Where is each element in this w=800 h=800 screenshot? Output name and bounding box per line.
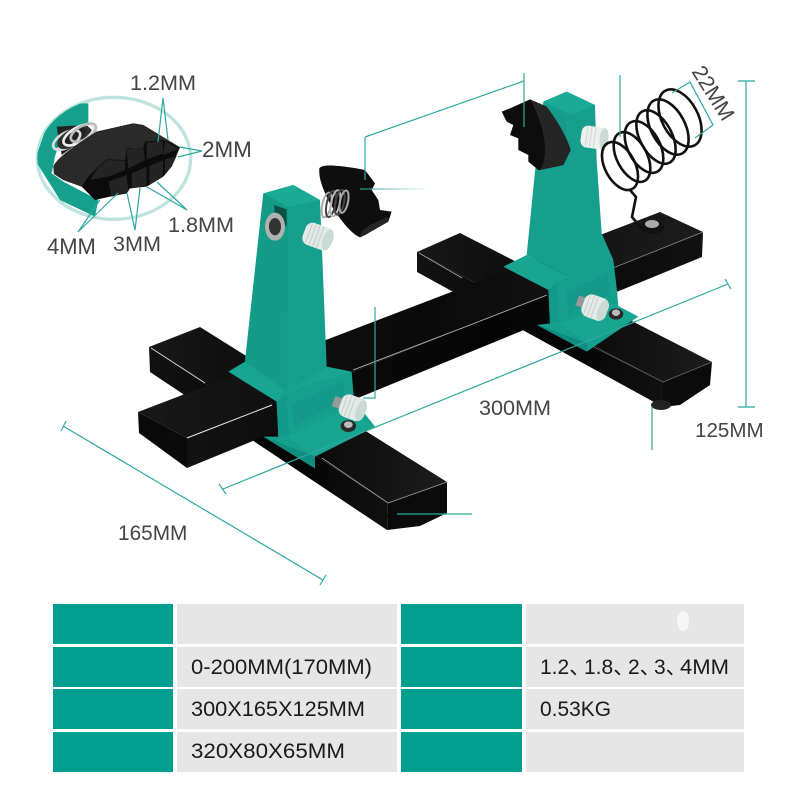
table row 2: 1.2、 (540, 656, 590, 679)
table row 4: 320X80X65MM (191, 740, 345, 763)
table row 1 (53, 604, 744, 644)
inset green stand (35, 103, 98, 217)
table row 3: 0.53KG (540, 698, 611, 721)
label: 165MM: 165MM (118, 522, 187, 545)
dimension: 165MM line (61, 421, 326, 585)
right foot bar (417, 233, 712, 410)
right green stand (503, 92, 638, 352)
table row 2: 4MM (680, 656, 729, 679)
left foot bar (149, 327, 447, 530)
table row 2: 2、 (628, 656, 661, 679)
left tower screw (265, 205, 287, 241)
inset teeth (90, 141, 179, 197)
inset detail: jaw teeth close-up (35, 97, 191, 219)
left upper thumb knob (300, 221, 336, 253)
dimension: foot pointers (397, 407, 652, 514)
left spring (320, 189, 350, 218)
table row 2: 0-200MM(170MM) (191, 656, 372, 679)
dimension: knob pointer (363, 307, 375, 398)
table row 2: 3、 (654, 656, 687, 679)
dimension: 125MM line (738, 81, 755, 407)
inset jaw (53, 123, 180, 200)
label: 3MM: 3MM (113, 231, 161, 256)
spec table (53, 604, 744, 772)
inset spring (52, 122, 98, 155)
table row 3 (53, 689, 744, 729)
solder iron spring holder (595, 82, 710, 230)
label: 4MM: 4MM (47, 234, 96, 259)
dimension: 300MM line (219, 279, 731, 494)
left base screw (341, 420, 356, 432)
label: 2MM: 2MM (202, 137, 252, 162)
table row 2: 1.8、 (584, 656, 634, 679)
label: 1.8MM: 1.8MM (168, 212, 234, 237)
right top thumb knob (580, 125, 610, 150)
dimension: jaw pointers (360, 75, 620, 190)
label: 125MM: 125MM (695, 419, 764, 442)
right lower thumb knob (573, 290, 611, 323)
table row 2 (53, 647, 744, 687)
label: 300MM: 300MM (479, 395, 551, 420)
right base screw (609, 308, 623, 320)
right saddle (503, 233, 638, 352)
left green stand (228, 185, 375, 468)
right tower (527, 92, 613, 278)
right black jaw (502, 99, 571, 170)
dimension: clamp gap (365, 73, 524, 180)
table row 4 (53, 732, 744, 772)
left tower (245, 185, 327, 392)
left saddle (228, 362, 375, 468)
main beam (138, 212, 703, 468)
label: 22MM: 22MM (687, 61, 740, 125)
holder mount screw (640, 220, 664, 234)
inset callout lines (78, 98, 202, 232)
table row 3: 300X165X125MM (191, 698, 365, 721)
left lower thumb knob (330, 390, 370, 423)
label: 1.2MM: 1.2MM (130, 70, 196, 95)
left black jaw (319, 165, 392, 237)
dimension: 22MM spring diameter (672, 82, 713, 138)
